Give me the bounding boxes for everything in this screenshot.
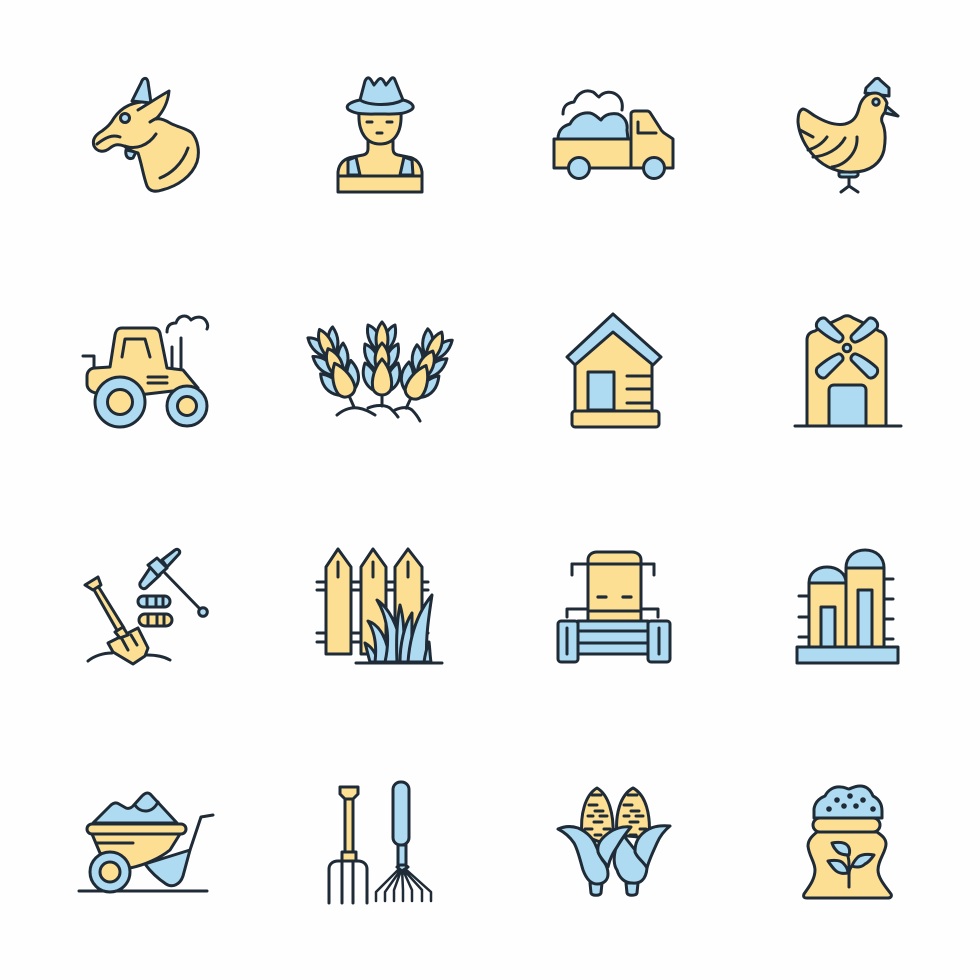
icon: corn: [558, 788, 670, 895]
icon: combine harvester: [558, 552, 670, 662]
icon: grain silos: [797, 550, 898, 663]
icon: pickup truck: [554, 91, 673, 178]
icon: wheat: [302, 322, 458, 421]
icon: fence and grass: [317, 549, 442, 663]
icon: hen: [798, 78, 898, 192]
icon: pitchfork and rake: [329, 782, 431, 903]
icon: fertilizer sack: [804, 786, 891, 898]
icon: tractor: [83, 316, 208, 427]
icon: wheelbarrow: [79, 793, 213, 892]
icon: farmer: [338, 78, 422, 192]
icon: farmhouse: [567, 314, 661, 427]
icon: windmill: [795, 316, 901, 426]
icon: shovel, pickaxe and seeds: [85, 549, 207, 664]
icon: goat head: [93, 78, 198, 191]
